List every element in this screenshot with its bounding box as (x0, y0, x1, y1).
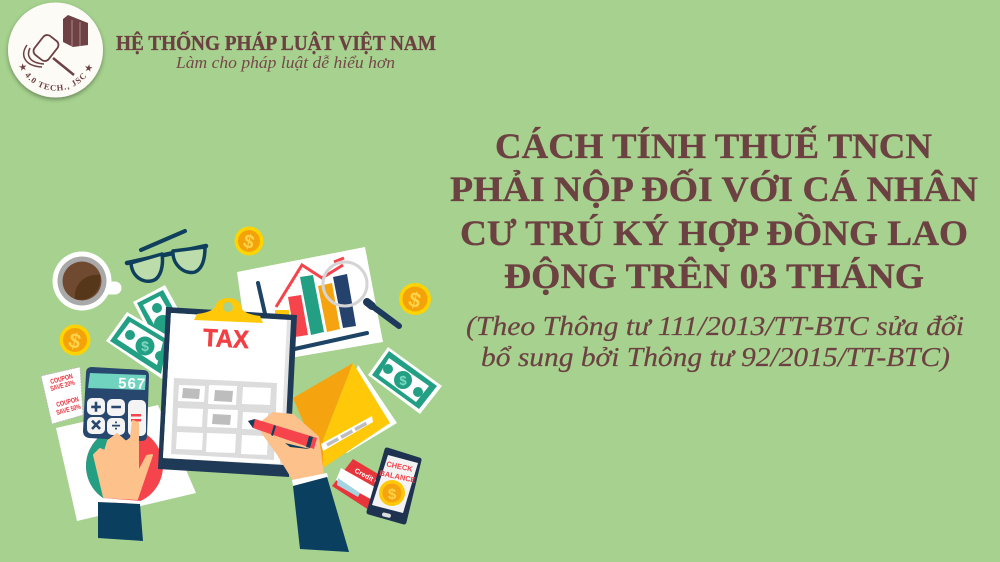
title (450, 126, 978, 296)
red pen (248, 419, 317, 449)
subtitle: (Theo Thông tư 111/2013/TT-BTC sửa đổi (466, 311, 964, 341)
icon: banknote front (106, 312, 170, 379)
icon: coin right: $ (406, 288, 424, 313)
title: PHẢI NỘP ĐỐI VỚI CÁ NHÂN (450, 168, 978, 209)
illustration (41, 226, 442, 552)
icon: coin top (234, 226, 264, 256)
icon: books (63, 15, 88, 47)
icon: smartphone: $ (388, 486, 397, 503)
icon: glasses (127, 231, 206, 281)
clipboard clip (194, 298, 263, 323)
logo ring text: ★ 4.0 TECH., JSC ★ (19, 63, 92, 91)
icon: coin left (60, 324, 90, 356)
left hand (94, 421, 152, 541)
organization name: HỆ THỐNG PHÁP LUẬT VIỆT NAM (116, 31, 436, 55)
icon: smartphone (369, 450, 419, 522)
icon: banknote right (368, 347, 442, 414)
coupons: COUPON (56, 396, 80, 409)
coupons (41, 367, 83, 424)
subtitle: bổ sung bởi Thông tư 92/2015/TT-BTC) (481, 342, 950, 372)
title: CÁCH TÍNH THUẾ TNCN (495, 126, 932, 166)
icon: credit card: Credit C (353, 468, 380, 487)
left sleeve (98, 502, 143, 541)
title: ĐỘNG TRÊN 03 THÁNG (504, 256, 924, 296)
icon: calculator: × (91, 415, 101, 435)
chart on paper (237, 247, 383, 365)
icon: calculator: − (111, 397, 121, 417)
icon: smartphone: BALANCE (379, 468, 416, 485)
TAX heading: TAX (202, 324, 250, 354)
icon: magnifying glass (323, 262, 399, 326)
icon: coin right (399, 283, 431, 315)
paper under hand (56, 405, 196, 521)
subtitle (466, 311, 964, 372)
icon: calculator: ÷ (112, 418, 121, 435)
right hand with pen (248, 413, 349, 552)
icon: coin top: $ (241, 231, 257, 254)
icon: calculator (83, 367, 149, 441)
icon: banknote back (133, 285, 182, 350)
coupons: SAVE 50% (56, 404, 82, 417)
form grid (171, 378, 277, 460)
icon: coffee cup (52, 252, 115, 310)
folder with envelope (293, 363, 397, 468)
pie circle behind hand (86, 434, 163, 504)
icon: banknote front: $ (141, 338, 149, 354)
icon: smartphone: CHECK (386, 459, 414, 474)
coupons: COUPON (50, 373, 74, 386)
coupons: SAVE 20% (50, 380, 76, 393)
icon: calculator: + (91, 397, 101, 417)
tagline: Làm cho pháp luật dễ hiểu hơn (175, 53, 395, 72)
icon: credit card (332, 459, 385, 514)
icon: coin left: $ (66, 329, 84, 354)
icon: gavel (24, 33, 74, 75)
icon: calculator: 567 (118, 375, 146, 393)
right sleeve (293, 477, 349, 552)
clipboard (158, 298, 297, 477)
icon: banknote right: $ (399, 373, 407, 388)
logo (6, 2, 106, 102)
title: CƯ TRÚ KÝ HỢP ĐỒNG LAO (460, 212, 968, 253)
